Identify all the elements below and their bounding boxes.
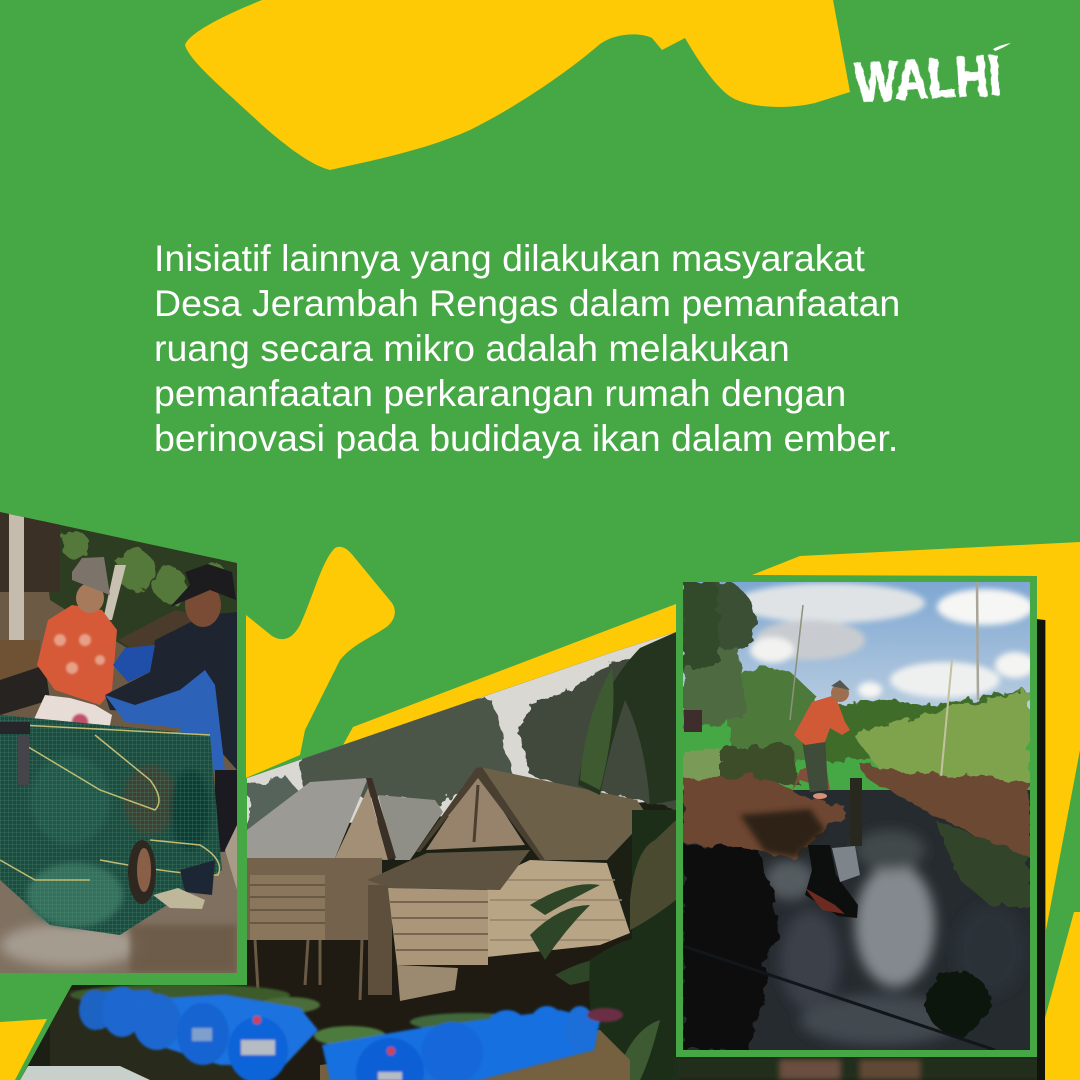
frame: right photo bbox=[676, 576, 1037, 1057]
photo: two men with fish net bbox=[0, 505, 240, 975]
photo: man at peat canal bbox=[675, 580, 1035, 1052]
pole bbox=[9, 512, 24, 647]
white bag bbox=[34, 695, 112, 726]
photo: wooden stilt houses with blue barrels bbox=[20, 570, 1045, 1080]
man 1 bbox=[37, 557, 117, 705]
grey metal roof rear bbox=[378, 795, 443, 860]
man 2 bbox=[105, 564, 237, 875]
barrels bbox=[70, 984, 623, 1080]
wooden house bbox=[0, 512, 60, 592]
right wooden wall bbox=[487, 860, 630, 957]
yellow squiggle shape left bbox=[246, 547, 395, 778]
body text: pemanfaatan perkarangan rumah dengan bbox=[154, 372, 846, 414]
leaves below right photo bbox=[676, 1056, 1045, 1080]
plank panel bbox=[388, 888, 488, 965]
reflections bbox=[683, 820, 1030, 1052]
yellow top brush shape bbox=[185, 0, 850, 170]
fish net bbox=[0, 715, 222, 935]
black pipe bbox=[683, 946, 995, 1050]
left wooden wall bbox=[247, 858, 382, 940]
yellow lower-right block bbox=[1045, 912, 1080, 1080]
grey metal roof left bbox=[247, 778, 368, 858]
yellow diagonal stripe bbox=[343, 604, 676, 745]
ground left bbox=[0, 640, 40, 680]
post bbox=[850, 778, 862, 846]
yellow lower-left corner bbox=[0, 1019, 47, 1080]
sky and clouds bbox=[683, 582, 1030, 712]
lower thatch roof bbox=[367, 850, 530, 890]
trees bbox=[40, 520, 237, 650]
thatched roof right bbox=[480, 767, 648, 860]
wood gable left bbox=[335, 788, 388, 860]
WALHI logo: WALHI bbox=[853, 43, 1002, 114]
man reflection bbox=[805, 845, 858, 918]
cloud reflection in water bbox=[765, 830, 1025, 1045]
man bbox=[792, 680, 850, 799]
bushes bbox=[675, 580, 1030, 790]
ground bbox=[0, 850, 237, 973]
sky bbox=[247, 630, 676, 830]
scooter front bbox=[113, 645, 155, 682]
ground slope behind bbox=[118, 610, 192, 648]
banks bbox=[683, 764, 1030, 857]
dark understory bbox=[247, 938, 667, 1080]
stairs column bbox=[368, 885, 392, 995]
frame: left photo bbox=[0, 505, 246, 985]
trees behind houses bbox=[247, 658, 676, 830]
tire and shoe bbox=[128, 840, 156, 904]
body text: Inisiatif lainnya yang dilakukan masyarakat bbox=[154, 237, 865, 279]
wood gable right bbox=[426, 772, 525, 850]
ground bbox=[50, 990, 250, 1080]
body text: berinovasi pada budidaya ikan dalam ember. bbox=[154, 417, 898, 459]
dark strip right bbox=[1037, 620, 1045, 1080]
palm and mango leaves bbox=[530, 632, 680, 1080]
water bbox=[683, 790, 1030, 1052]
body text bbox=[154, 237, 900, 459]
body text: Desa Jerambah Rengas dalam pemanfaatan bbox=[154, 282, 900, 324]
body text: ruang secara mikro adalah melakukan bbox=[154, 327, 790, 369]
yellow top-right band and side bbox=[752, 542, 1080, 930]
thin trees bbox=[977, 582, 978, 700]
